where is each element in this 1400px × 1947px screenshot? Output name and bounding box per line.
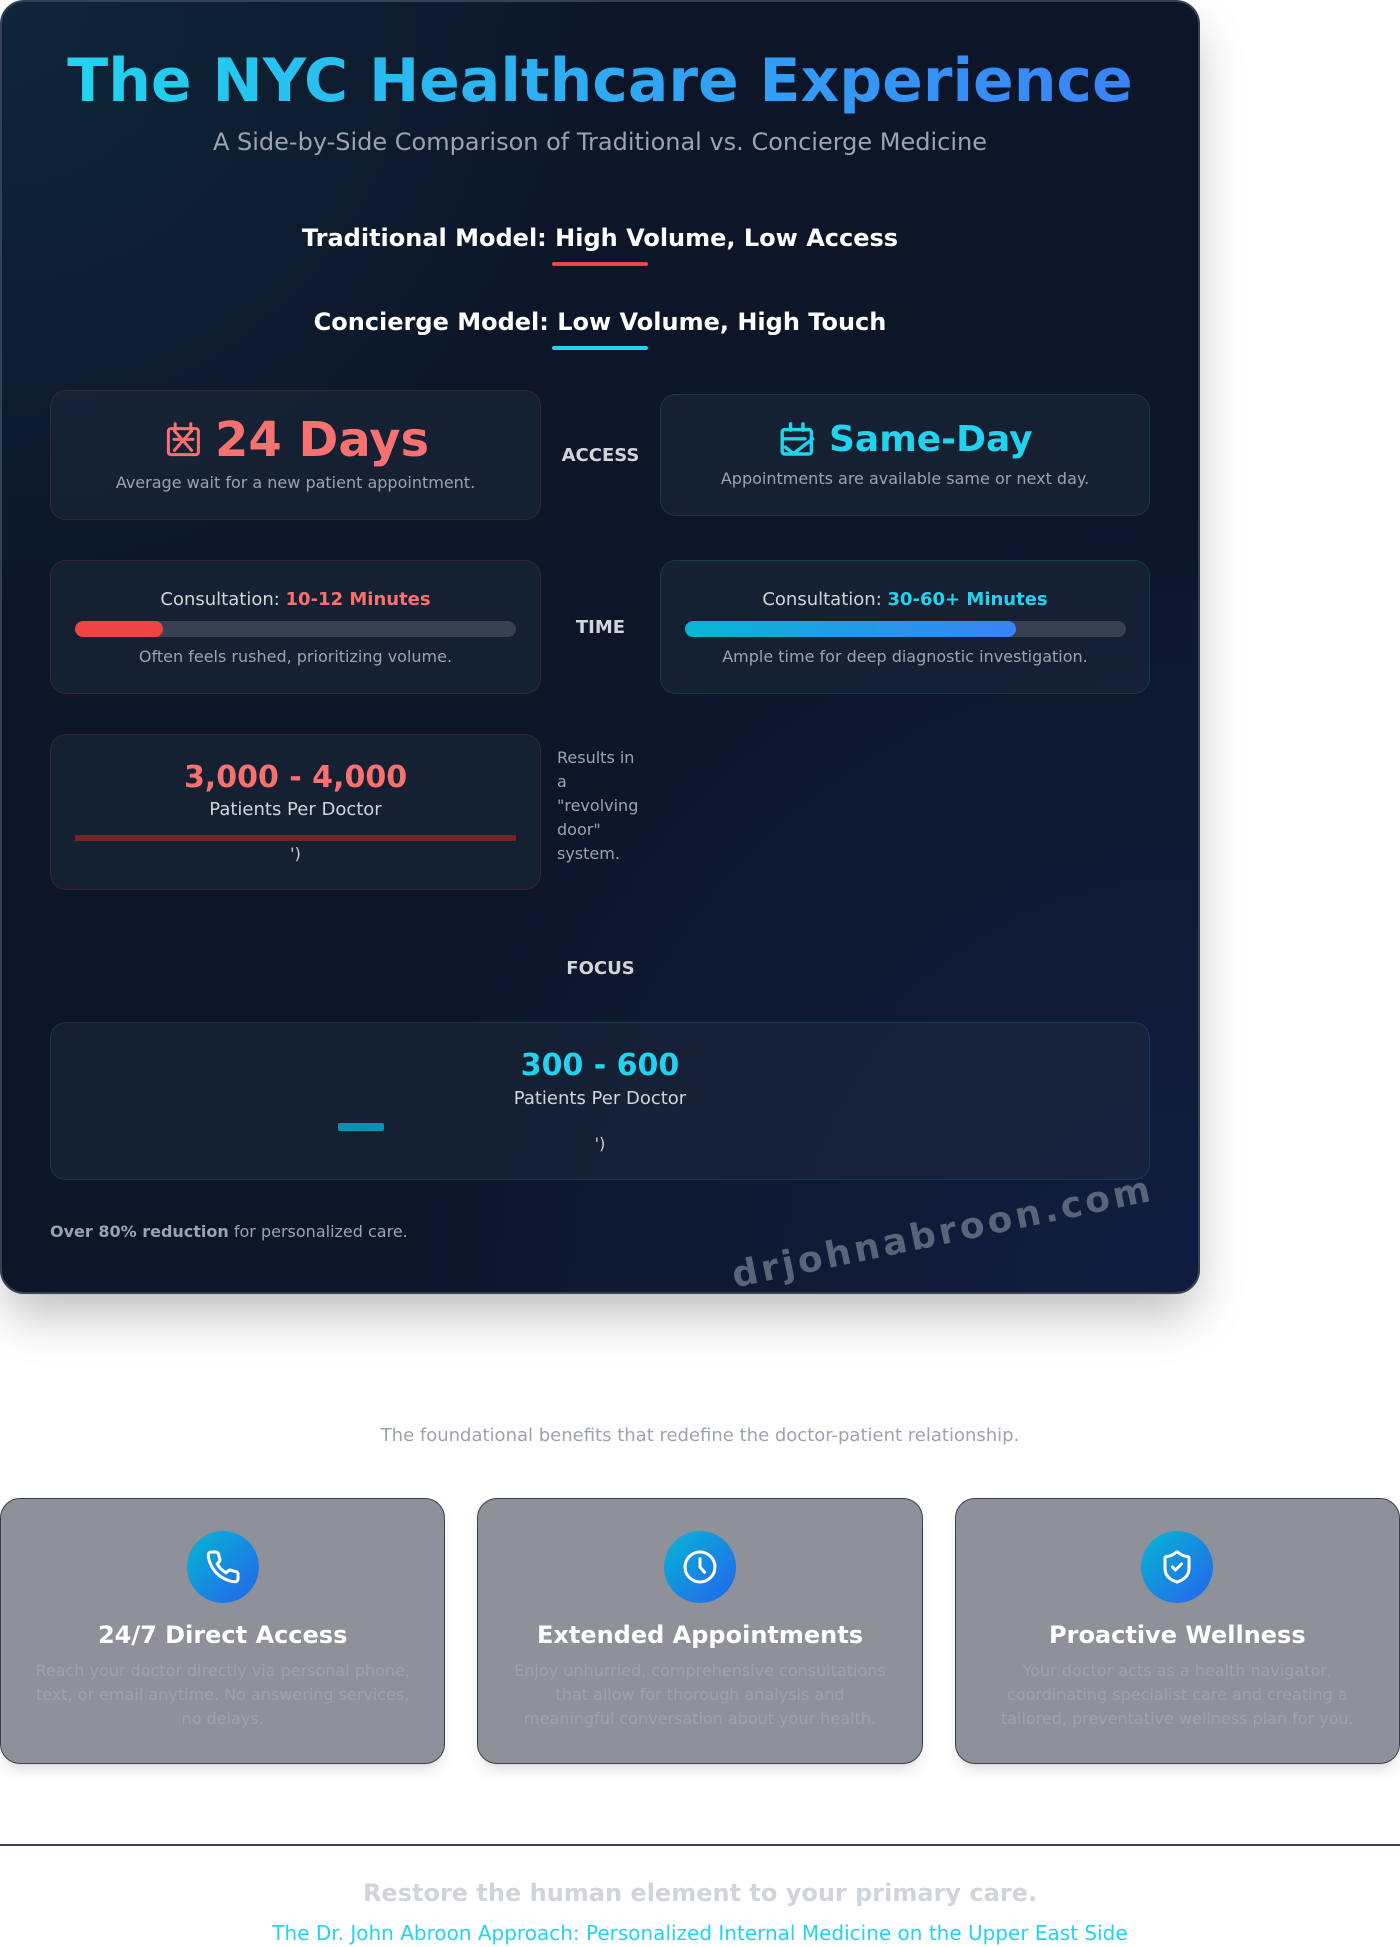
accent bar: concierge	[552, 346, 648, 350]
heading: concierge model: Concierge Model: Low Volume, High Touch	[314, 308, 886, 336]
note: revolving door: system.	[557, 844, 620, 863]
footer headline: Restore the human element to your primary care.	[363, 1879, 1037, 1907]
card: proactive wellness	[955, 1498, 1400, 1764]
card text: tailored, preventative wellness plan for you.	[1001, 1709, 1354, 1728]
card title: Extended Appointments	[537, 1621, 863, 1649]
card text	[514, 1661, 886, 1728]
stat: patients range: 3,000 - 4,000	[184, 760, 407, 795]
watermark: drjohnabroon.com	[729, 1169, 1158, 1294]
card: extended appointments	[477, 1498, 923, 1764]
panel: comparison	[0, 0, 1200, 1294]
consultation text: Consultation: 30-60+ Minutes	[762, 589, 1048, 610]
note: revolving door: a	[557, 772, 567, 791]
card text: coordinating specialist care and creating a	[1007, 1685, 1348, 1704]
note: revolving door: "revolving	[557, 796, 638, 815]
description: Often feels rushed, prioritizing volume.	[139, 647, 452, 666]
card title: Proactive Wellness	[1049, 1621, 1306, 1649]
panel contents	[50, 46, 1158, 1294]
card: 24 days wait	[50, 390, 541, 520]
card: traditional patients	[50, 734, 541, 890]
note: revolving door: door"	[557, 820, 601, 839]
bar	[338, 1123, 384, 1131]
description: Appointments are available same or next day.	[721, 469, 1089, 488]
label: focus: FOCUS	[566, 958, 635, 979]
section intro: The foundational benefits that redefine the doctor-patient relationship.	[381, 1425, 1019, 1446]
icon: clock	[664, 1531, 736, 1603]
consultation text: Consultation: 10-12 Minutes	[160, 589, 431, 610]
icon: calendar with check	[780, 422, 814, 456]
card text: Reach your doctor directly via personal phone,	[35, 1661, 410, 1680]
card: direct access	[0, 1498, 445, 1764]
stat: patients range: 300 - 600	[521, 1048, 679, 1083]
card text: Your doctor acts as a health navigator,	[1023, 1661, 1332, 1680]
bar: 20 percent	[75, 621, 516, 637]
card text: meaningful conversation about your health.	[524, 1709, 876, 1728]
bar fill	[685, 621, 1016, 637]
card: concierge patients	[50, 1022, 1150, 1180]
stat: same-day: Same-Day	[829, 419, 1033, 460]
icon: calendar with x	[166, 422, 200, 456]
stat: 24 days: 24 Days	[215, 412, 429, 468]
subtitle: A Side-by-Side Comparison of Traditional vs. Concierge Medicine	[213, 128, 987, 156]
card text: text, or email anytime. No answering services,	[36, 1685, 409, 1704]
footer link: The Dr. John Abroon Approach: Personalized Internal Medicine on the Upper East Side	[272, 1921, 1128, 1945]
icon: shield check	[1141, 1531, 1213, 1603]
icon: phone	[187, 1531, 259, 1603]
stray text: ')	[290, 844, 301, 863]
card title: 24/7 Direct Access	[98, 1621, 347, 1649]
footer divider	[0, 1844, 1400, 1846]
heading: traditional model: Traditional Model: High Volume, Low Access	[302, 224, 898, 252]
note: revolving door	[557, 748, 638, 863]
label: time: TIME	[576, 617, 625, 638]
bar	[75, 835, 516, 841]
description: Average wait for a new patient appointment.	[116, 473, 475, 492]
label: Patients Per Doctor	[209, 799, 382, 820]
card: concierge consultation	[660, 560, 1150, 694]
card text: that allow for thorough analysis and	[555, 1685, 844, 1704]
card text: no delays.	[182, 1709, 264, 1728]
card: traditional consultation	[50, 560, 541, 694]
note: revolving door: Results in	[557, 748, 634, 767]
bar: 75 percent	[685, 621, 1126, 637]
label: access: ACCESS	[562, 445, 639, 466]
stray text: ')	[595, 1134, 605, 1153]
card text	[1001, 1661, 1354, 1728]
title: The NYC Healthcare Experience	[67, 46, 1133, 116]
label: Patients Per Doctor	[514, 1088, 686, 1109]
bar fill	[75, 621, 163, 637]
description: Ample time for deep diagnostic investigation.	[722, 647, 1088, 666]
accent bar: traditional	[552, 262, 648, 266]
card text	[35, 1661, 410, 1728]
card text: Enjoy unhurried, comprehensive consultations	[514, 1661, 886, 1680]
note: reduction: Over 80% reduction for personalized care.	[50, 1222, 408, 1241]
card: same-day	[660, 394, 1150, 516]
